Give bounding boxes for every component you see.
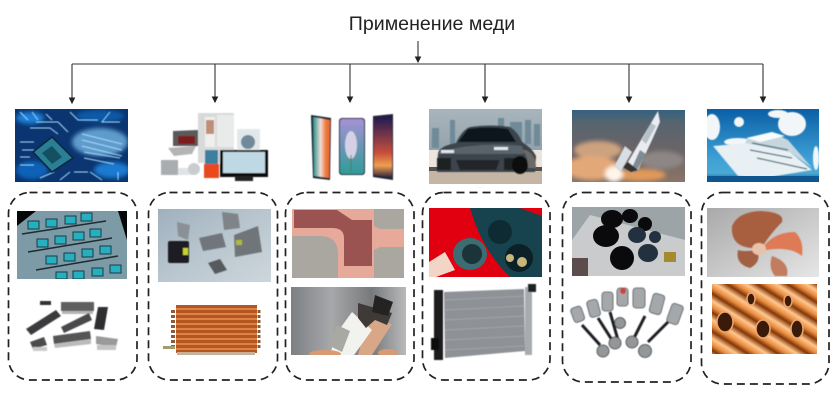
panel: appliance components: [148, 192, 278, 380]
panel: aerospace components: [562, 192, 691, 382]
image: integrated circuit chips: [26, 301, 118, 351]
image: rocket launch: [564, 110, 685, 182]
panel: electronics components: [8, 192, 137, 380]
image: rocket engine nozzles: [572, 207, 685, 276]
title: Применение меди: [349, 13, 515, 35]
image: USB connectors: [291, 287, 406, 358]
panel: automotive components: [422, 192, 550, 380]
image: copper pipes: [712, 284, 817, 354]
image: circuit board processor: [15, 109, 130, 182]
image: cruise ship: [704, 109, 819, 182]
image: smartphones: [311, 114, 393, 180]
image: industrial connectors: [158, 209, 271, 282]
panel: marine components: [702, 192, 829, 384]
image: metal connectors assembly: [570, 288, 684, 358]
image: copper propeller: [707, 208, 819, 277]
image: car radiator: [431, 284, 536, 360]
image: semiconductor lead frame: [17, 211, 127, 279]
panel: smartphone components: [286, 192, 414, 380]
image: sports car: [429, 109, 542, 184]
image: copper heat pipe plate: [292, 209, 404, 278]
arrow tree: [72, 41, 763, 103]
image: EV charging connector: [429, 208, 542, 277]
image: copper heat exchanger: [163, 305, 259, 355]
image: home appliances: [161, 113, 268, 181]
